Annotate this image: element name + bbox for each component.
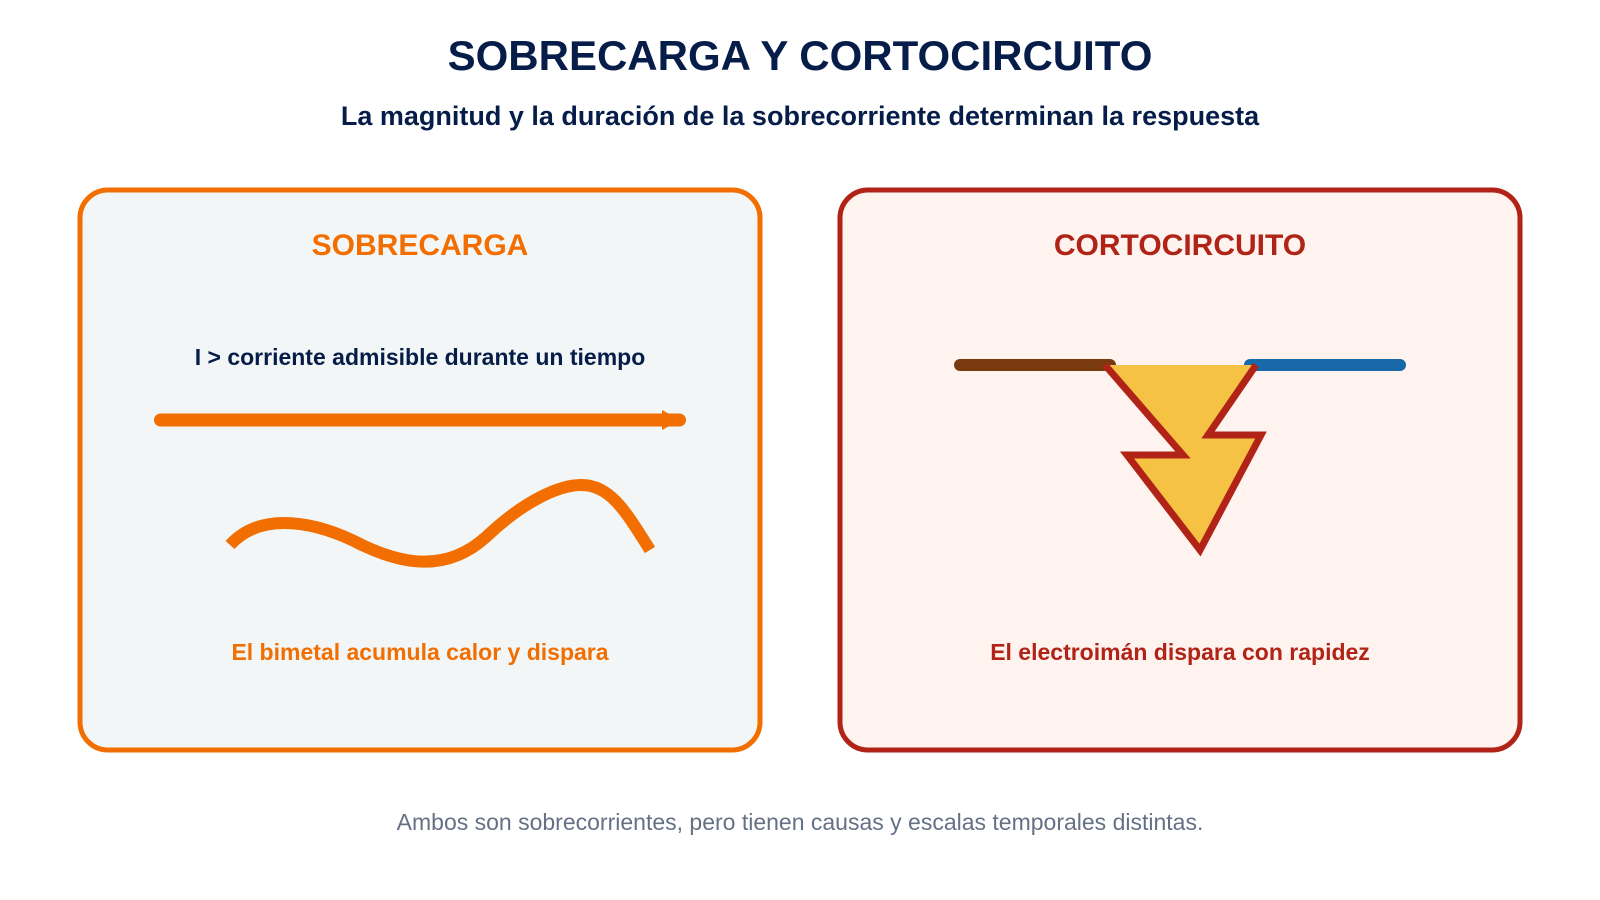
heading: cortocircuito: CORTOCIRCUITO [1054,229,1306,262]
panel: sobrecarga [80,190,760,750]
subtitle: La magnitud y la duración de la sobrecorriente determinan la respuesta [341,101,1260,131]
footer note: Ambos son sobrecorrientes, pero tienen causas y escalas temporales distintas. [397,809,1203,835]
text: electromagnet explanation: El electroimán dispara con rapidez [990,639,1370,665]
panel: cortocircuito [840,190,1520,750]
text: bimetal explanation: El bimetal acumula calor y dispara [231,639,609,665]
icon: lightning bolt [1105,365,1261,550]
panel background: cortocircuito [840,190,1520,750]
conductor: blue wire [1250,359,1400,371]
heading: sobrecarga: SOBRECARGA [312,229,528,262]
wave: bimetal heating curve [230,485,650,562]
arrow: sustained current [160,410,680,430]
title: SOBRECARGA Y CORTOCIRCUITO [448,32,1152,79]
text: current condition: I > corriente admisible durante un tiempo [195,344,645,370]
panel background: sobrecarga [80,190,760,750]
conductor: brown wire [960,359,1110,371]
